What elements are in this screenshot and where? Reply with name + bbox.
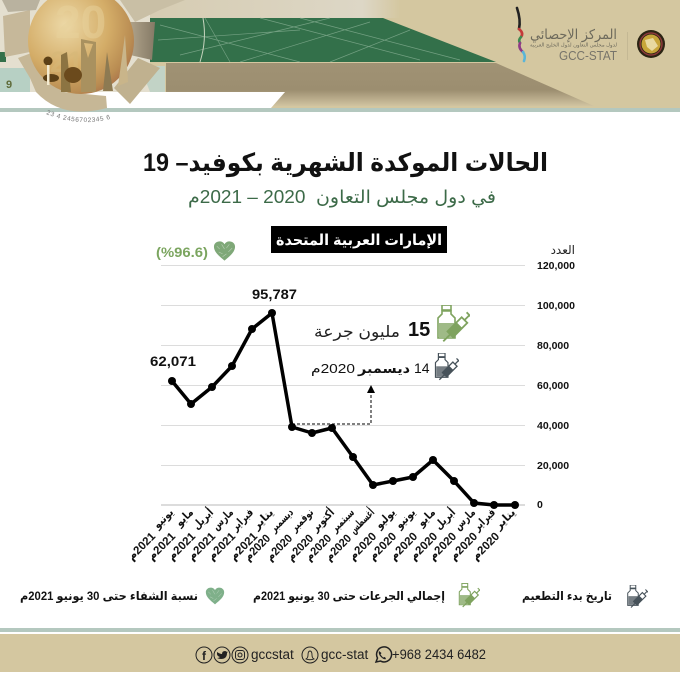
x axis labels: مارس — [210, 507, 236, 533]
x axis labels: أبريل — [431, 505, 458, 532]
ribbon — [517, 8, 525, 61]
rule — [0, 108, 680, 112]
legend: vaccination start: تاريخ بدء التطعيم — [522, 589, 612, 603]
icon: instagram — [232, 647, 248, 663]
image medallion — [0, 0, 184, 122]
x axis labels: سبتمبر — [328, 507, 357, 535]
country label — [271, 226, 447, 253]
x axis labels: 2020م — [408, 531, 440, 563]
data line — [168, 309, 519, 509]
recovery rate callout — [156, 241, 235, 261]
icon: facebook — [196, 647, 212, 663]
x axis labels: 2020م — [242, 533, 273, 564]
image medallion: 21 — [50, 46, 83, 79]
white cut-out — [0, 92, 285, 108]
x axis labels: أكتوبر — [308, 505, 337, 535]
icon: heart — [214, 241, 235, 261]
vaccination start callout: 2020م — [311, 361, 355, 376]
x axis labels: 2020م — [285, 533, 316, 564]
x axis labels: 2020م — [303, 533, 334, 564]
x axis labels: مايو — [173, 507, 196, 530]
emblem — [637, 30, 665, 58]
footer: +968 2434 6482 — [392, 647, 486, 662]
x axis labels: 2021م — [126, 530, 159, 563]
icon: twitter — [214, 647, 230, 663]
axis labels: 0 — [537, 499, 543, 511]
icon: whatsapp — [376, 647, 392, 662]
x axis labels: يناير — [250, 507, 276, 533]
x axis labels: أبريل — [189, 505, 216, 532]
axis labels: 40,000 — [537, 420, 569, 432]
axis labels: العدد — [551, 243, 575, 257]
arrow: vaccination start — [292, 385, 375, 424]
x axis labels: 2020م — [323, 533, 354, 564]
legend: total doses — [253, 583, 481, 609]
x axis labels: 2021م — [186, 530, 219, 563]
x axis labels: فبراير — [471, 507, 498, 534]
icon: vial and syringe dark — [435, 353, 461, 382]
taupe band — [166, 63, 594, 106]
axis labels: 100,000 — [537, 300, 575, 312]
vaccination start callout — [311, 353, 461, 382]
x axis labels: يوليو — [373, 507, 398, 532]
x axis labels — [126, 505, 518, 564]
x axis labels: مارس — [452, 507, 478, 533]
x axis labels: 2021م — [206, 530, 239, 563]
x axis labels: 2020م — [448, 531, 480, 563]
vaccination start callout: 14 — [414, 360, 430, 376]
ring numerals: 23 4 2456702345 6 — [46, 110, 110, 122]
image medallion: 9 — [6, 79, 12, 91]
x axis labels: 2020م — [347, 531, 379, 563]
doses callout — [314, 305, 472, 344]
green band — [150, 18, 496, 62]
x axis labels: 2021م — [228, 530, 261, 563]
skyline — [43, 35, 128, 92]
legend: recovery: نسبة الشفاء حتى 30 يونيو 2021م — [20, 589, 198, 604]
recovery rate callout: (%96.6) — [156, 244, 208, 260]
line chart — [126, 243, 575, 564]
data label: 95,787: 95,787 — [252, 286, 297, 302]
legend: total doses: إجمالي الجرعات حتى 30 يونيو 2021م — [253, 589, 445, 604]
x axis labels: 2020م — [264, 533, 295, 564]
x axis labels: 2020م — [367, 531, 399, 563]
x axis labels: يونيو — [393, 507, 418, 532]
doses callout: 15 — [408, 319, 430, 341]
logo: المركز الإحصائي — [530, 27, 617, 43]
title: الحالات الموكدة الشهرية بكوفيد– 19 — [143, 149, 548, 178]
logo: GCC-STAT — [559, 48, 617, 63]
country label: الإمارات العربية المتحدة — [276, 232, 442, 249]
x axis labels: 2020م — [470, 531, 502, 563]
vaccination start callout: ديسمبر — [357, 361, 410, 376]
icon: snapchat — [302, 647, 318, 663]
x axis labels: أغسطس — [346, 505, 377, 536]
axis labels: 80,000 — [537, 340, 569, 352]
footer: gccstat — [251, 647, 294, 662]
x axis labels: ديسمبر — [267, 506, 296, 535]
footer — [0, 634, 680, 672]
doses callout: مليون جرعة — [314, 324, 400, 342]
x axis labels: مايو — [415, 507, 438, 530]
axis labels: 120,000 — [537, 260, 575, 272]
x axis labels: فبراير — [229, 507, 256, 534]
footer rule — [0, 628, 680, 632]
axis labels — [537, 243, 575, 511]
x axis labels: يناير — [492, 507, 518, 533]
logo — [517, 8, 665, 63]
subtitle: في دول مجلس التعاون 2020 – 2021م — [188, 187, 496, 208]
x axis labels: نوفمبر — [288, 507, 316, 535]
icon: facebook: f — [202, 649, 207, 663]
data label: 62,071: 62,071 — [150, 353, 196, 369]
logo: لدول مجلس التعاون لدول الخليج العربية — [530, 42, 617, 48]
gridlines — [161, 266, 525, 505]
x axis labels: 2020م — [388, 531, 420, 563]
x axis labels: 2021م — [146, 530, 179, 563]
footer: gcc-stat — [321, 647, 369, 662]
icon: vial and syringe green — [438, 305, 472, 344]
x axis labels: يونيو — [151, 507, 176, 532]
axis labels: 60,000 — [537, 380, 569, 392]
x axis labels: 2021م — [166, 530, 199, 563]
axis labels: 20,000 — [537, 460, 569, 472]
x axis labels: 2020م — [427, 531, 459, 563]
legend: vaccination start — [522, 585, 649, 609]
legend — [20, 583, 649, 609]
header banner — [0, 0, 680, 122]
